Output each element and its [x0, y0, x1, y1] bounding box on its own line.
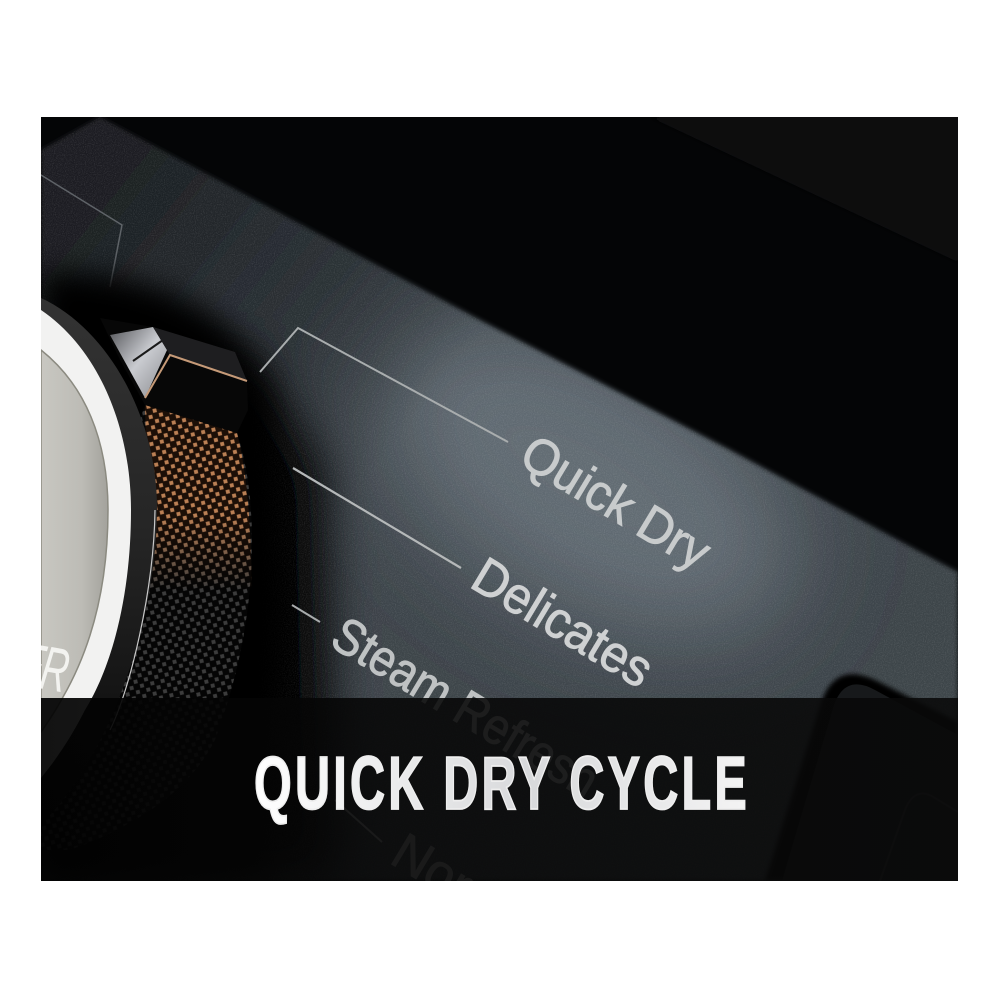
dial cast shadow [41, 258, 290, 698]
label: Normal: Normal [382, 823, 553, 957]
title band [41, 698, 958, 881]
dial lettering partial: E [12, 630, 51, 703]
label: Delicates: Delicates [462, 547, 663, 699]
chrome facet [110, 327, 167, 398]
label: Steam Refresh: Steam Refresh [322, 606, 609, 809]
photo panel: dryer control dial and cycle labels [41, 117, 958, 881]
copper edge highlight [145, 355, 247, 398]
upper right dim strip [650, 117, 958, 262]
knurled ring copper reflection [145, 405, 252, 586]
facet notch [133, 340, 163, 361]
photo background [41, 117, 958, 881]
dial collar top [146, 405, 232, 432]
control button recess [765, 674, 958, 881]
bezel glint [110, 510, 155, 730]
control dial [41, 298, 252, 778]
bezel [41, 298, 157, 698]
dial lettering: R [36, 634, 74, 706]
bracket line: Quick Dry [260, 328, 508, 442]
label: Quick Dry: Quick Dry [511, 424, 721, 581]
title: QUICK DRY CYCLE [254, 741, 750, 825]
upper left panel bracket line [41, 175, 122, 287]
white ring [41, 310, 131, 778]
panel grain [41, 117, 958, 698]
bracket line: Delicates [293, 468, 461, 568]
knurled ring [119, 406, 252, 698]
dial face [41, 350, 108, 732]
control panel surface [41, 117, 958, 881]
bracket line: Normal [335, 800, 382, 842]
upper facet [153, 327, 247, 381]
bracket line: Steam Refresh [292, 605, 320, 622]
